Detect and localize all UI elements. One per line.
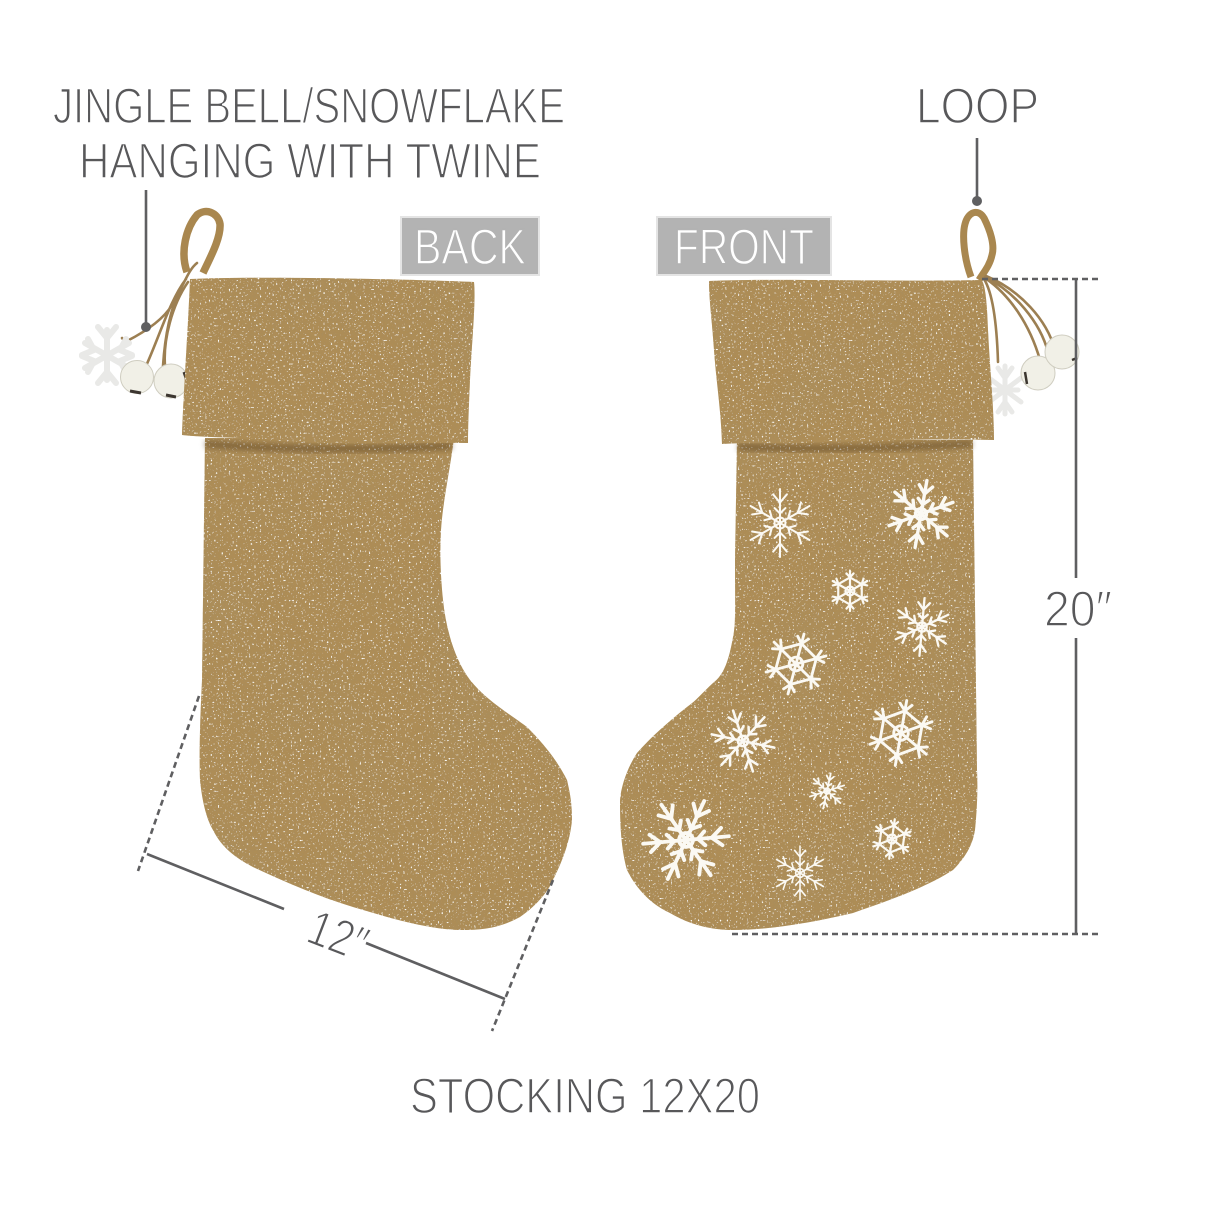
hanging loop, back [184, 212, 220, 273]
pointer: loop [972, 138, 982, 206]
heading: jingle bell / snowflake hanging with twine: HANGING WITH TWINE [79, 133, 541, 189]
leg and foot, front [620, 440, 977, 930]
heading: jingle bell / snowflake hanging with twine [53, 78, 565, 189]
pointer: twine hanging [141, 190, 151, 332]
twine and charms, front [984, 276, 1079, 414]
snowflake 5 [762, 627, 830, 701]
snowflake 4 [894, 596, 950, 658]
heading: jingle bell / snowflake hanging with twine: JINGLE BELL/SNOWFLAKE [53, 78, 565, 134]
snowflake 10 [634, 785, 738, 895]
hanging loop, front [964, 212, 993, 280]
cuff, back [182, 278, 475, 443]
snowflake 11 [777, 846, 823, 900]
snowflake 8 [808, 770, 846, 812]
cuff shadow, back [205, 444, 452, 449]
front stocking [620, 212, 1079, 930]
leg and foot, back [200, 438, 572, 930]
snowflake 2 [886, 475, 956, 553]
heading: loop: LOOP [916, 78, 1039, 134]
dimension: width 12 inches: 12″ [300, 899, 376, 973]
back stocking [82, 212, 572, 930]
label: back: BACK [414, 219, 526, 275]
snowflake 6 [707, 702, 779, 780]
label: front: FRONT [674, 219, 814, 275]
dimension: height 20 inches: 20″ [1044, 581, 1112, 637]
snowflake 1 [751, 489, 809, 557]
snowflake 9 [872, 817, 912, 861]
cuff, front [709, 280, 994, 444]
cuff shadow, front [738, 444, 972, 448]
snowflake charm, front [989, 366, 1021, 414]
snowflake charm, back [82, 327, 132, 383]
embroidered snowflakes [634, 475, 956, 900]
snowflake 7 [867, 696, 935, 770]
snowflake 3 [833, 571, 867, 611]
twine and charms, back [82, 263, 197, 398]
caption: STOCKING 12X20 [410, 1068, 760, 1124]
dimension: width 12 inches [138, 696, 553, 1031]
